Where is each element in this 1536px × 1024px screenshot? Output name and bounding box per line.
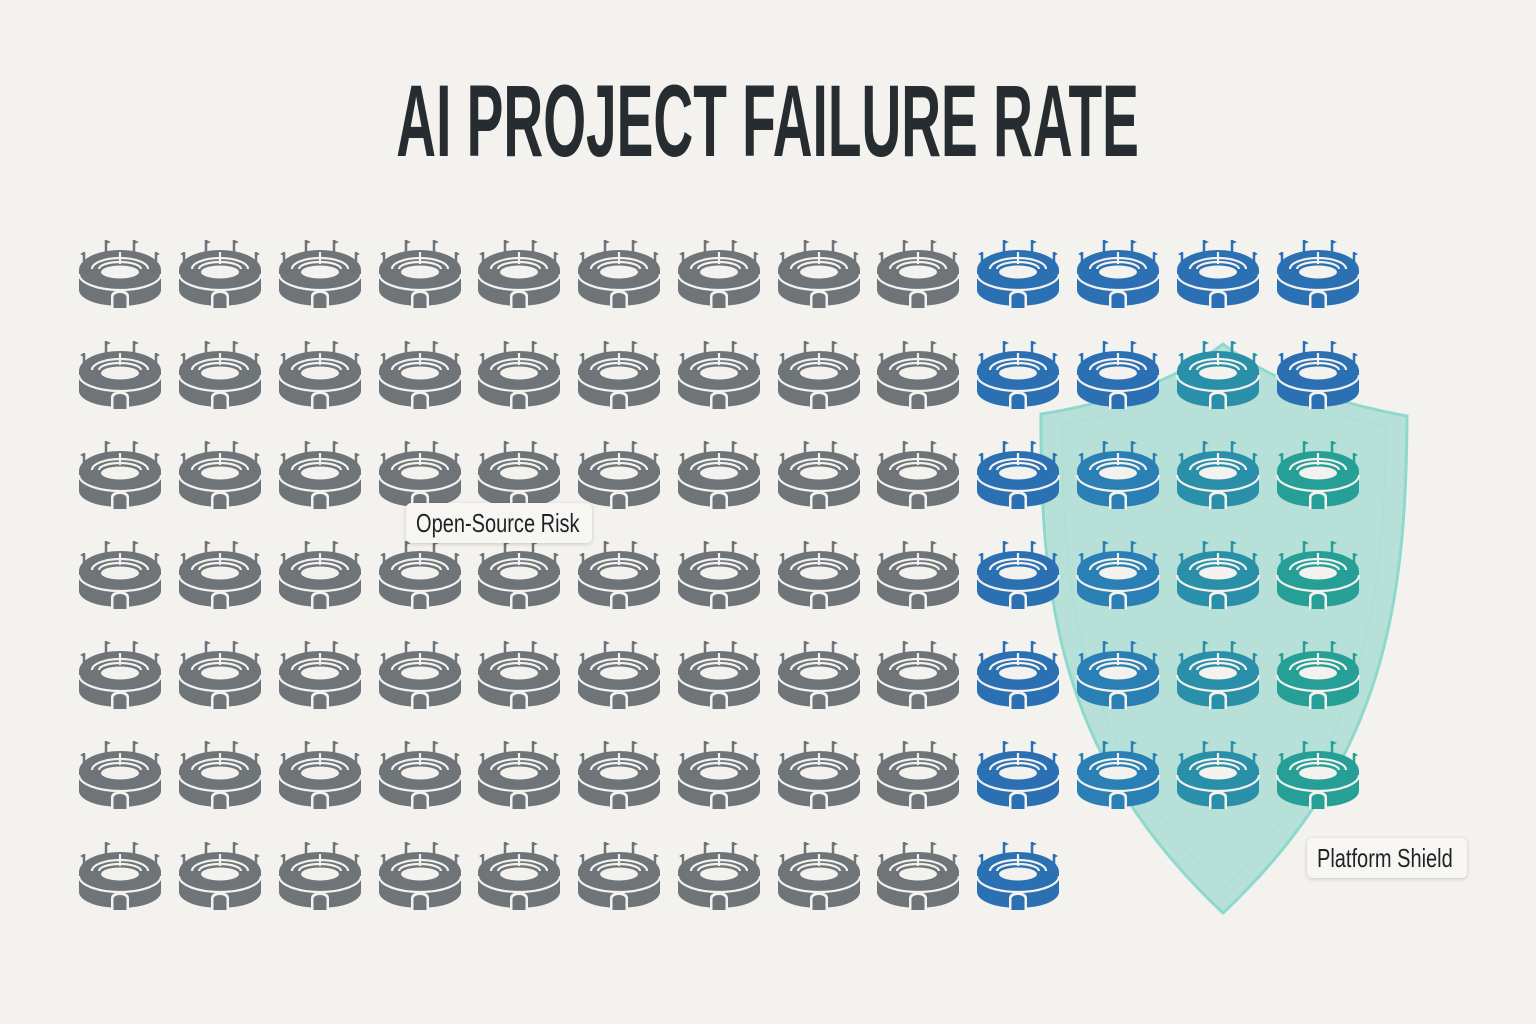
- shielded icons: [1077, 441, 1159, 809]
- gray icons: [79, 240, 959, 910]
- blue icons: [977, 240, 1359, 910]
- label: platform shield: [1307, 838, 1467, 878]
- label: open-source risk: Open-Source Risk: [416, 508, 580, 538]
- label: open-source risk: [406, 503, 592, 543]
- label: platform shield: Platform Shield: [1317, 843, 1453, 873]
- shield: [1041, 344, 1407, 913]
- title: AI PROJECT FAILURE RATE: [397, 64, 1139, 178]
